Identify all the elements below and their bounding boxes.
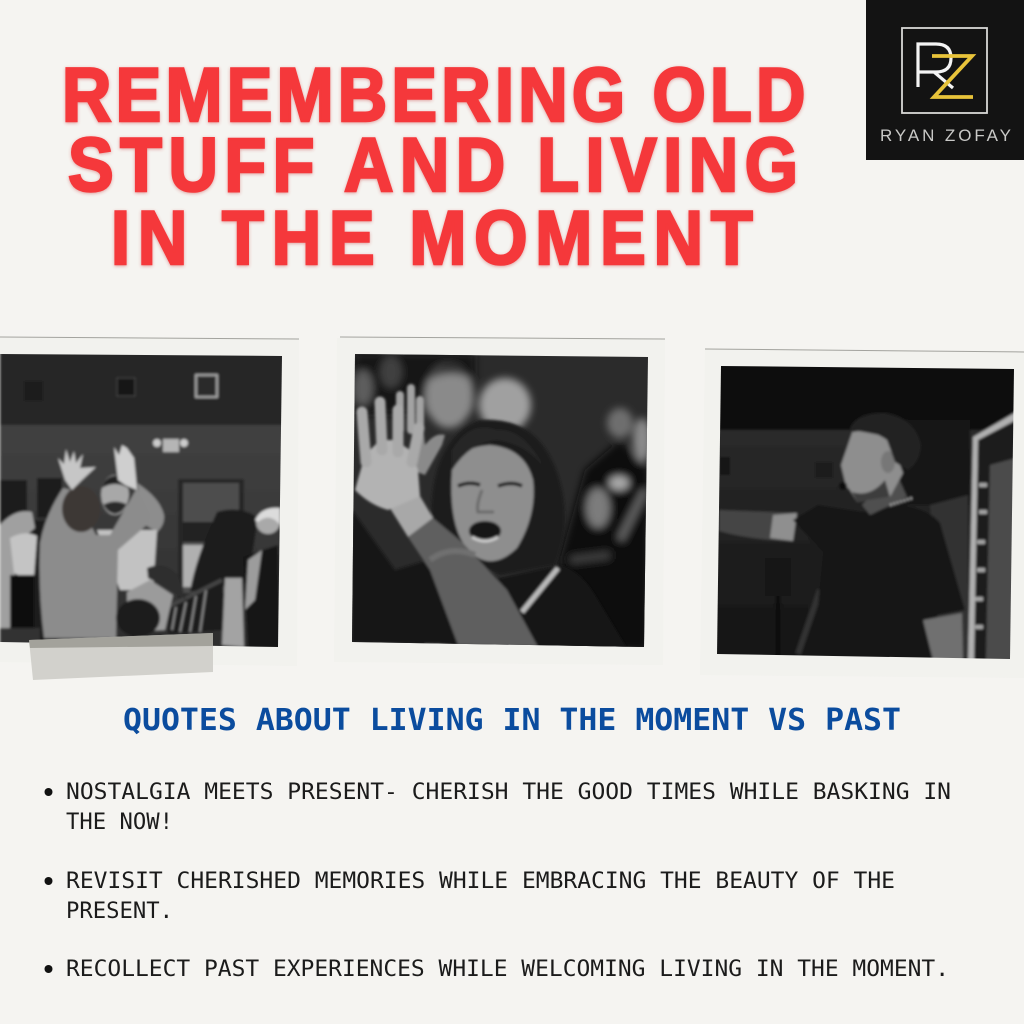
bullet list — [44, 780, 951, 982]
bullet 3: RECOLLECT PAST EXPERIENCES WHILE WELCOMING LIVING IN THE MOMENT. — [66, 957, 949, 982]
title — [62, 54, 805, 281]
photo card: crowd high five — [0, 337, 299, 680]
title: REMEMBERING OLD — [62, 54, 805, 138]
bullet 2: REVISIT CHERISHED MEMORIES WHILE EMBRACING THE BEAUTY OF THE — [66, 869, 895, 894]
title: IN THE MOMENT — [111, 197, 753, 281]
photo card: speaker on stage — [700, 349, 1024, 678]
bullet 1 — [44, 780, 951, 835]
logo: Ryan Zofay: RYAN ZOFAY — [880, 126, 1011, 145]
bullet 1: THE NOW! — [66, 810, 173, 835]
tape — [29, 633, 213, 680]
title: STUFF AND LIVING — [68, 124, 798, 208]
photo card: crying woman high five — [334, 337, 665, 665]
subheading: QUOTES ABOUT LIVING IN THE MOMENT VS PAST — [123, 703, 901, 738]
bullet 1: NOSTALGIA MEETS PRESENT- CHERISH THE GOOD TIMES WHILE BASKING IN — [66, 780, 951, 805]
bullet 2 — [44, 869, 895, 924]
bullet 2: PRESENT. — [66, 899, 173, 924]
logo: Ryan Zofay — [866, 0, 1024, 160]
